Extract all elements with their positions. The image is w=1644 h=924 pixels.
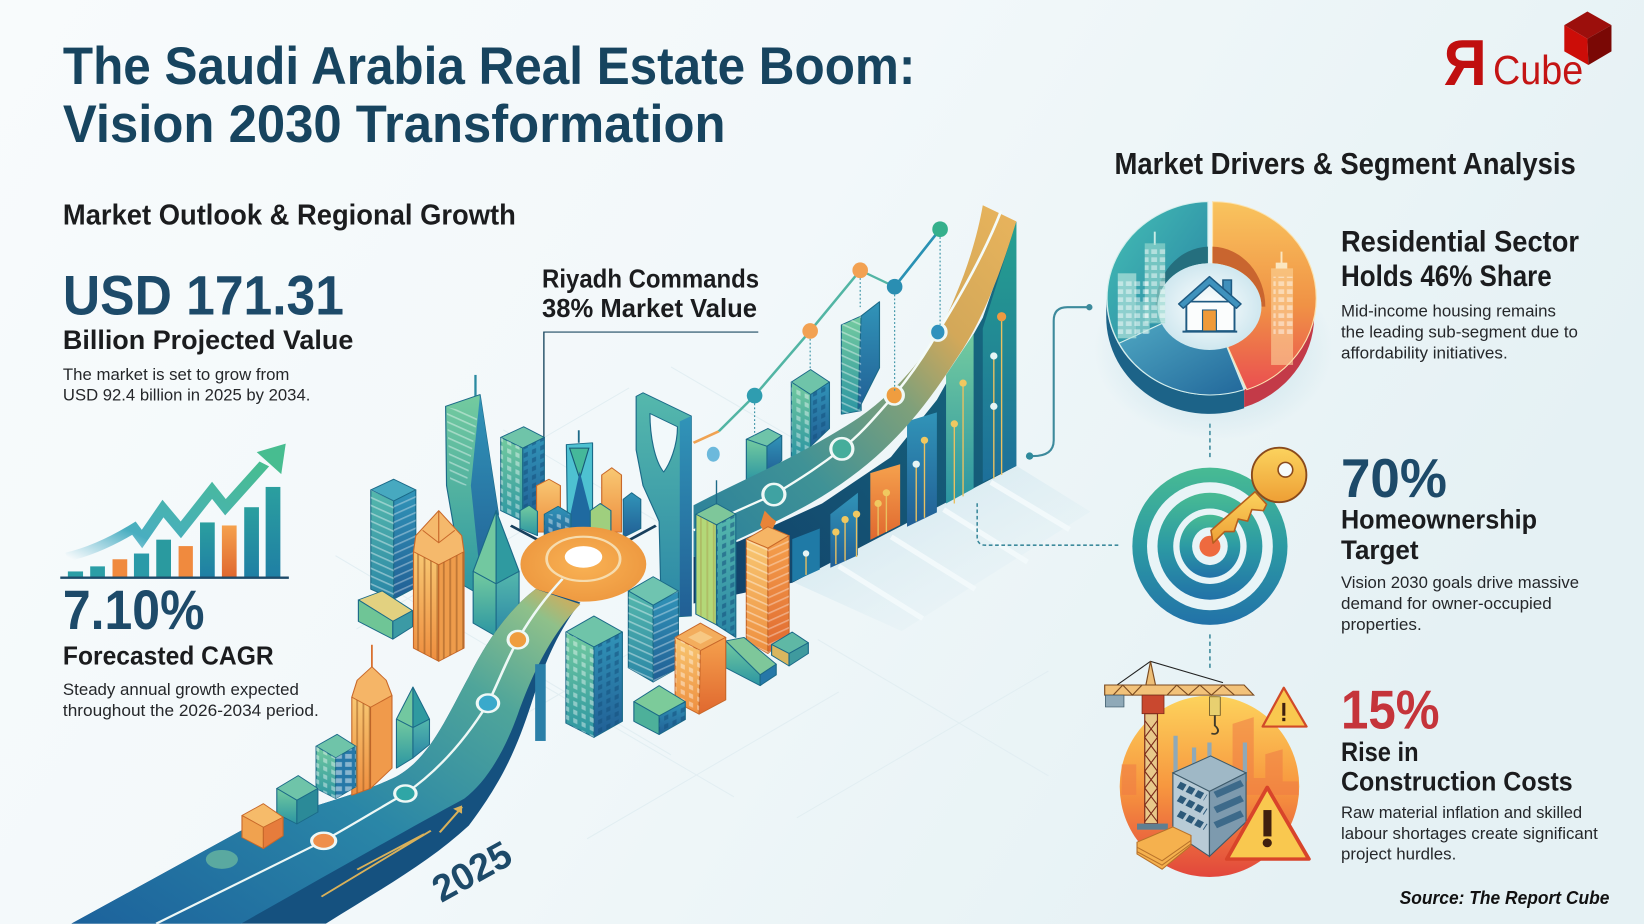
crane hook bbox=[1209, 697, 1220, 734]
stat: projected value: Billion Projected Value bbox=[63, 324, 353, 355]
building: teal block bbox=[316, 734, 356, 799]
heading: market outlook: Market Outlook & Regional Growth bbox=[63, 198, 516, 230]
hub disc bbox=[520, 527, 646, 602]
key bbox=[1211, 448, 1306, 543]
donut hole bbox=[1157, 263, 1261, 350]
building: low green box bbox=[358, 591, 413, 639]
text: homeownership: Vision 2030 goals drive massive bbox=[1341, 573, 1579, 592]
callout leader line bbox=[544, 332, 758, 486]
callout: Riyadh: 38% Market Value bbox=[542, 293, 757, 323]
text: residential sector: Residential Sector bbox=[1341, 226, 1579, 259]
title: The Saudi Arabia Real Estate Boom: bbox=[63, 38, 915, 96]
logo: Я bbox=[1444, 26, 1487, 99]
building: left blue tower bbox=[371, 479, 416, 599]
material stack bbox=[1137, 827, 1191, 869]
dashed connector target to construction bbox=[1209, 634, 1211, 668]
upper growth road bbox=[694, 205, 1016, 557]
text: construction costs: labour shortages create significant bbox=[1341, 824, 1598, 843]
donut inner walls bbox=[1156, 247, 1265, 307]
text: construction costs: Rise in bbox=[1341, 736, 1419, 767]
building: small green spire bbox=[396, 687, 429, 768]
stat: CAGR: Steady annual growth expected bbox=[63, 680, 299, 699]
text: homeownership: demand for owner-occupied bbox=[1341, 594, 1552, 613]
text: construction costs bbox=[1341, 680, 1598, 864]
upper road centre line bbox=[694, 211, 1001, 530]
stat: projected value bbox=[63, 265, 353, 405]
hub platform outline bbox=[511, 526, 656, 545]
road label 2025: 2025 bbox=[425, 833, 519, 910]
wall shadow bbox=[793, 466, 1090, 631]
upper road nodes bbox=[763, 323, 946, 505]
unfinished building bbox=[1173, 736, 1246, 856]
text: residential sector: the leading sub-segment due to bbox=[1341, 323, 1578, 342]
text: homeownership bbox=[1341, 448, 1579, 634]
house icon bbox=[1179, 277, 1241, 333]
crane bbox=[1105, 661, 1254, 830]
donut blue segment bbox=[1119, 323, 1244, 395]
front buildings bbox=[535, 480, 808, 741]
donut chart icon bbox=[1094, 202, 1333, 440]
construction icon bbox=[1105, 661, 1309, 877]
donut shadow bbox=[1094, 260, 1333, 440]
text: homeownership: 70% bbox=[1341, 448, 1447, 509]
text: construction costs: project hurdles. bbox=[1341, 845, 1456, 864]
dashed connector donut to target bbox=[1209, 424, 1211, 458]
supporting pillar bbox=[535, 664, 546, 741]
connector from road to donut bbox=[1026, 304, 1093, 460]
building: far right slanted tower bbox=[841, 302, 879, 414]
building: small gable bbox=[772, 632, 808, 666]
lower road nodes bbox=[312, 631, 528, 849]
callout: Riyadh bbox=[542, 263, 759, 323]
stat: CAGR bbox=[63, 579, 319, 720]
building: orange stepped tower bbox=[413, 511, 464, 661]
mini bar chart with arrow bbox=[60, 444, 289, 579]
building: tall green tower bbox=[696, 480, 736, 637]
donut right building bbox=[1271, 252, 1293, 365]
isometric ground grid bbox=[336, 367, 1048, 839]
large warning sign bbox=[1227, 787, 1309, 859]
small road blob bbox=[206, 850, 238, 869]
stat: projected value: The market is set to grow from bbox=[63, 365, 289, 384]
text: construction costs: Raw material inflation and skilled bbox=[1341, 803, 1582, 822]
building: front orange block bbox=[675, 623, 726, 714]
text: residential sector bbox=[1341, 226, 1579, 363]
building: low green long bbox=[726, 637, 776, 686]
text: residential sector: Holds 46% Share bbox=[1341, 260, 1552, 293]
callout: Riyadh: Riyadh Commands bbox=[542, 263, 759, 293]
logo cube bbox=[1564, 12, 1611, 65]
donut side bbox=[1106, 298, 1314, 414]
line chart above road bbox=[694, 221, 948, 462]
source note: Source: The Report Cube bbox=[1400, 887, 1609, 908]
chart baseline bbox=[60, 577, 289, 579]
logo: Cube bbox=[1493, 47, 1583, 93]
trend arrow bbox=[67, 444, 286, 557]
logo bbox=[1444, 12, 1611, 99]
title bbox=[63, 38, 915, 154]
sun disc with skyline bbox=[1120, 696, 1299, 877]
building: green spire bbox=[473, 511, 519, 636]
text: homeownership: Homeownership bbox=[1341, 503, 1537, 534]
text: residential sector: affordability initiatives. bbox=[1341, 344, 1508, 363]
bars bbox=[68, 487, 280, 577]
target rings bbox=[1132, 468, 1288, 625]
building: twisted tower bbox=[446, 375, 498, 596]
text: homeownership: Target bbox=[1341, 534, 1419, 565]
building: front small cube bbox=[634, 686, 685, 735]
small warning sign bbox=[1263, 688, 1307, 727]
donut teal segment bbox=[1107, 202, 1208, 343]
building: mid right tower bbox=[791, 370, 829, 457]
building: orange cube bbox=[242, 804, 283, 849]
building: orange spire tower bbox=[352, 645, 392, 795]
building: rear green tower bbox=[501, 427, 544, 521]
upper right group bbox=[358, 205, 1016, 661]
building: centre teal tower bbox=[628, 577, 678, 682]
stat: projected value: USD 92.4 billion in 2025 by 2034. bbox=[63, 386, 310, 405]
building: orange striped tower bbox=[746, 511, 789, 653]
text: residential sector: Mid-income housing remains bbox=[1341, 302, 1556, 321]
donut orange segment bbox=[1213, 202, 1316, 390]
stat: CAGR: 7.10% bbox=[63, 579, 204, 641]
target with key icon bbox=[1132, 448, 1306, 625]
text: homeownership: properties. bbox=[1341, 615, 1422, 634]
donut left buildings bbox=[1118, 232, 1165, 338]
building: Kingdom Centre bbox=[636, 393, 691, 618]
heading: market drivers: Market Drivers & Segment Analysis bbox=[1115, 147, 1576, 181]
Riyadh cluster buildings bbox=[520, 430, 641, 543]
text: construction costs: 15% bbox=[1341, 680, 1440, 741]
lower road and left group bbox=[71, 546, 602, 924]
hub light bbox=[565, 546, 602, 568]
lower road bbox=[71, 579, 580, 924]
wall under road bbox=[694, 221, 1016, 603]
building: low right tower bbox=[746, 428, 782, 482]
stat: CAGR: Forecasted CAGR bbox=[63, 641, 274, 671]
building: teal box bbox=[277, 776, 318, 824]
dashed connector to target bbox=[977, 503, 1119, 545]
stat: projected value: USD 171.31 bbox=[63, 265, 344, 327]
text: construction costs: Construction Costs bbox=[1341, 766, 1573, 797]
title: Vision 2030 Transformation bbox=[63, 96, 726, 154]
building: front green tower bbox=[566, 616, 622, 737]
stat: CAGR: throughout the 2026-2034 period. bbox=[63, 701, 319, 720]
